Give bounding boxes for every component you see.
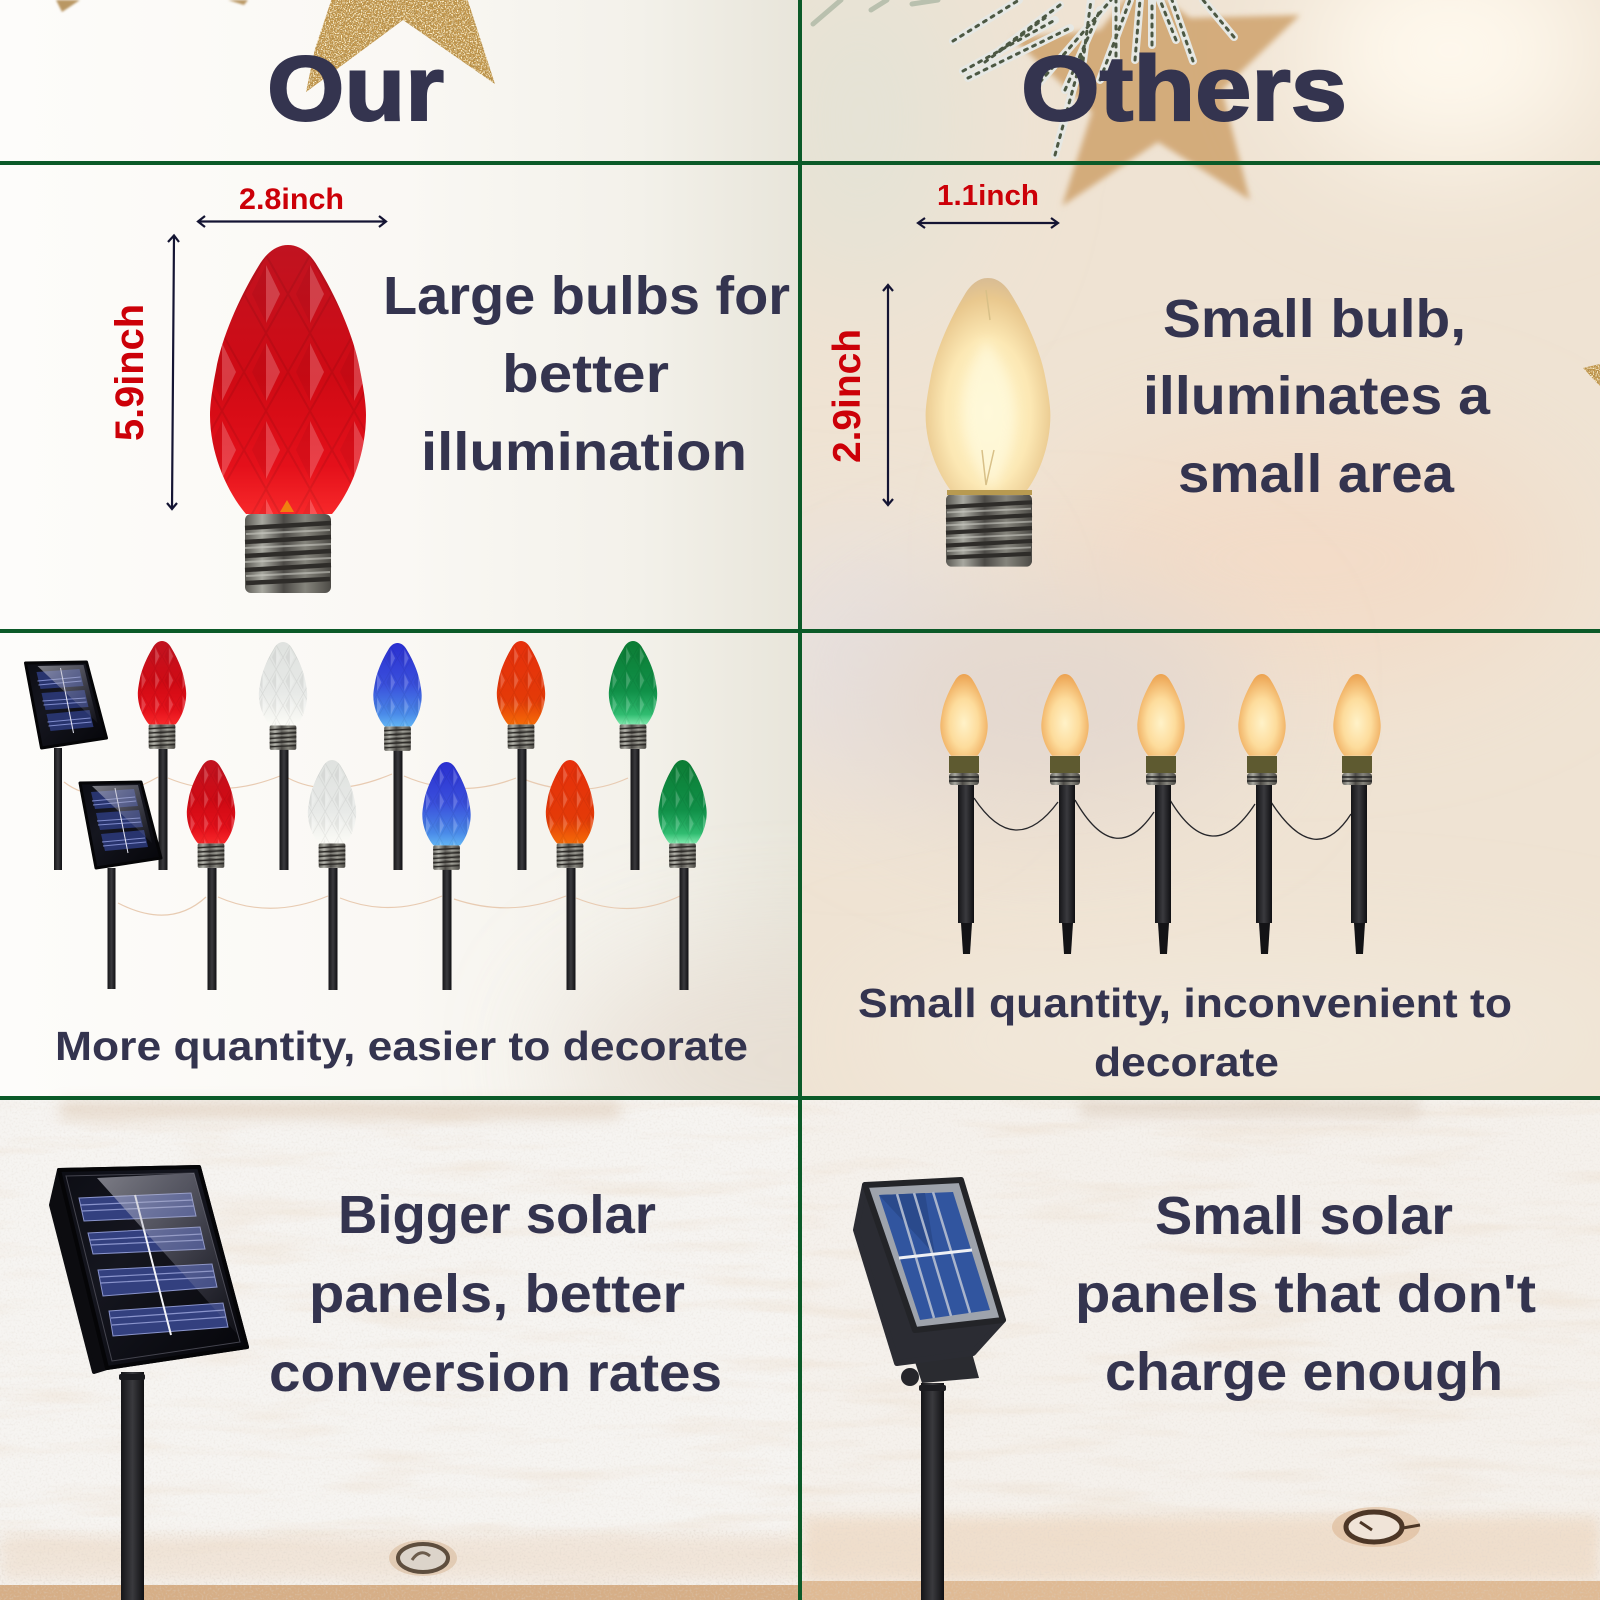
- panel: our large bulb: [108, 183, 386, 593]
- icon: blue bulb front row: [422, 762, 471, 870]
- icon: stake bulb two: [1041, 674, 1089, 954]
- text: small bulb: Small bulb,: [1163, 289, 1466, 349]
- panel: snowy wood background left: [0, 1096, 800, 1600]
- icon: orange bulb front row: [546, 760, 594, 868]
- arrow: bulb width: [198, 216, 386, 227]
- icon: stake bulb four: [1238, 674, 1286, 954]
- text: bigger solar panels: conversion rates: [269, 1343, 722, 1403]
- icon: red bulb back row: [138, 641, 186, 749]
- text: small bulb: illuminates a: [1143, 366, 1491, 426]
- text: small quantity: decorate: [1094, 1039, 1279, 1085]
- panel: snowy wood background right: [802, 1096, 1600, 1600]
- text: small bulb: small area: [1178, 444, 1455, 504]
- text: small solar panels: [1075, 1186, 1536, 1402]
- icon: solar panel two: [80, 782, 161, 989]
- icon: white bulb front row: [308, 760, 356, 868]
- icon: stake bulb one: [940, 674, 988, 954]
- icon: solar panel one: [26, 662, 106, 870]
- dimension label: width 1.1inch: 1.1inch: [937, 180, 1039, 212]
- icon: blurred gold star right: [1012, 0, 1300, 206]
- text: small solar panels: panels that don't: [1075, 1264, 1536, 1324]
- icon: green bulb back row: [609, 641, 657, 749]
- text: small bulb: [1143, 289, 1491, 504]
- dimension label: height 5.9inch: 5.9inch: [108, 304, 152, 441]
- text: bigger solar panels: panels, better: [309, 1264, 685, 1324]
- text: more quantity: More quantity, easier to decorate: [55, 1023, 748, 1069]
- icon: stake bulb five: [1333, 674, 1381, 954]
- text: small solar panels: charge enough: [1105, 1342, 1503, 1402]
- icon: blue bulb back row: [373, 643, 422, 751]
- heading: Others: Others: [1021, 38, 1347, 140]
- icon: small star at right edge: [1583, 364, 1600, 386]
- panel: left column background: [203, 0, 798, 1096]
- text: small quantity: Small quantity, inconvenient to: [858, 980, 1512, 1026]
- icon: gold glitter star left: [306, 0, 495, 92]
- dimension label: height 2.9inch: 2.9inch: [826, 329, 869, 463]
- icon: wood knot left: [389, 1540, 457, 1576]
- icon: frosted pine branch: [813, 0, 1234, 155]
- icon: red faceted bulb: [210, 245, 366, 593]
- icon: big solar panel: [51, 1167, 247, 1600]
- text: bigger solar panels: Bigger solar: [338, 1185, 656, 1245]
- wires: connecting cables: [974, 798, 1351, 839]
- icon: red bulb front row: [187, 760, 235, 868]
- arrow: small bulb width: [918, 218, 1058, 228]
- wires: connecting cables: [64, 774, 680, 915]
- arrow: small bulb height: [883, 285, 893, 505]
- text: large bulbs: illumination: [421, 422, 747, 482]
- icon: small solar panel: [856, 1180, 1003, 1600]
- icon: orange bulb back row: [497, 641, 545, 749]
- arrow: bulb height: [167, 236, 179, 509]
- heading: Our: Our: [267, 38, 444, 140]
- poles: back row: [158, 749, 640, 870]
- panel: our multi-colour stake lights: [26, 641, 707, 990]
- panel: others small bulb: [826, 180, 1058, 567]
- text: bigger solar panels: [269, 1185, 722, 1403]
- icon: green bulb front row: [658, 760, 707, 868]
- icon: white bulb back row: [259, 642, 307, 750]
- panel: right column background: [750, 0, 1600, 1110]
- icon: wood knot right: [1332, 1507, 1420, 1547]
- text: large bulbs: Large bulbs for: [383, 266, 790, 326]
- poles: front row: [208, 868, 688, 990]
- icon: stake bulb three: [1137, 674, 1185, 954]
- icon: blurred star fragments top left: [56, 0, 248, 12]
- dimension label: width 2.8inch: 2.8inch: [239, 183, 344, 216]
- icon: amber clear bulb: [926, 278, 1050, 567]
- text: large bulbs: [383, 266, 790, 482]
- text: small quantity: [858, 980, 1512, 1085]
- text: small solar panels: Small solar: [1155, 1186, 1453, 1246]
- panel: others stake lights: [940, 674, 1381, 954]
- text: large bulbs: better: [502, 344, 669, 404]
